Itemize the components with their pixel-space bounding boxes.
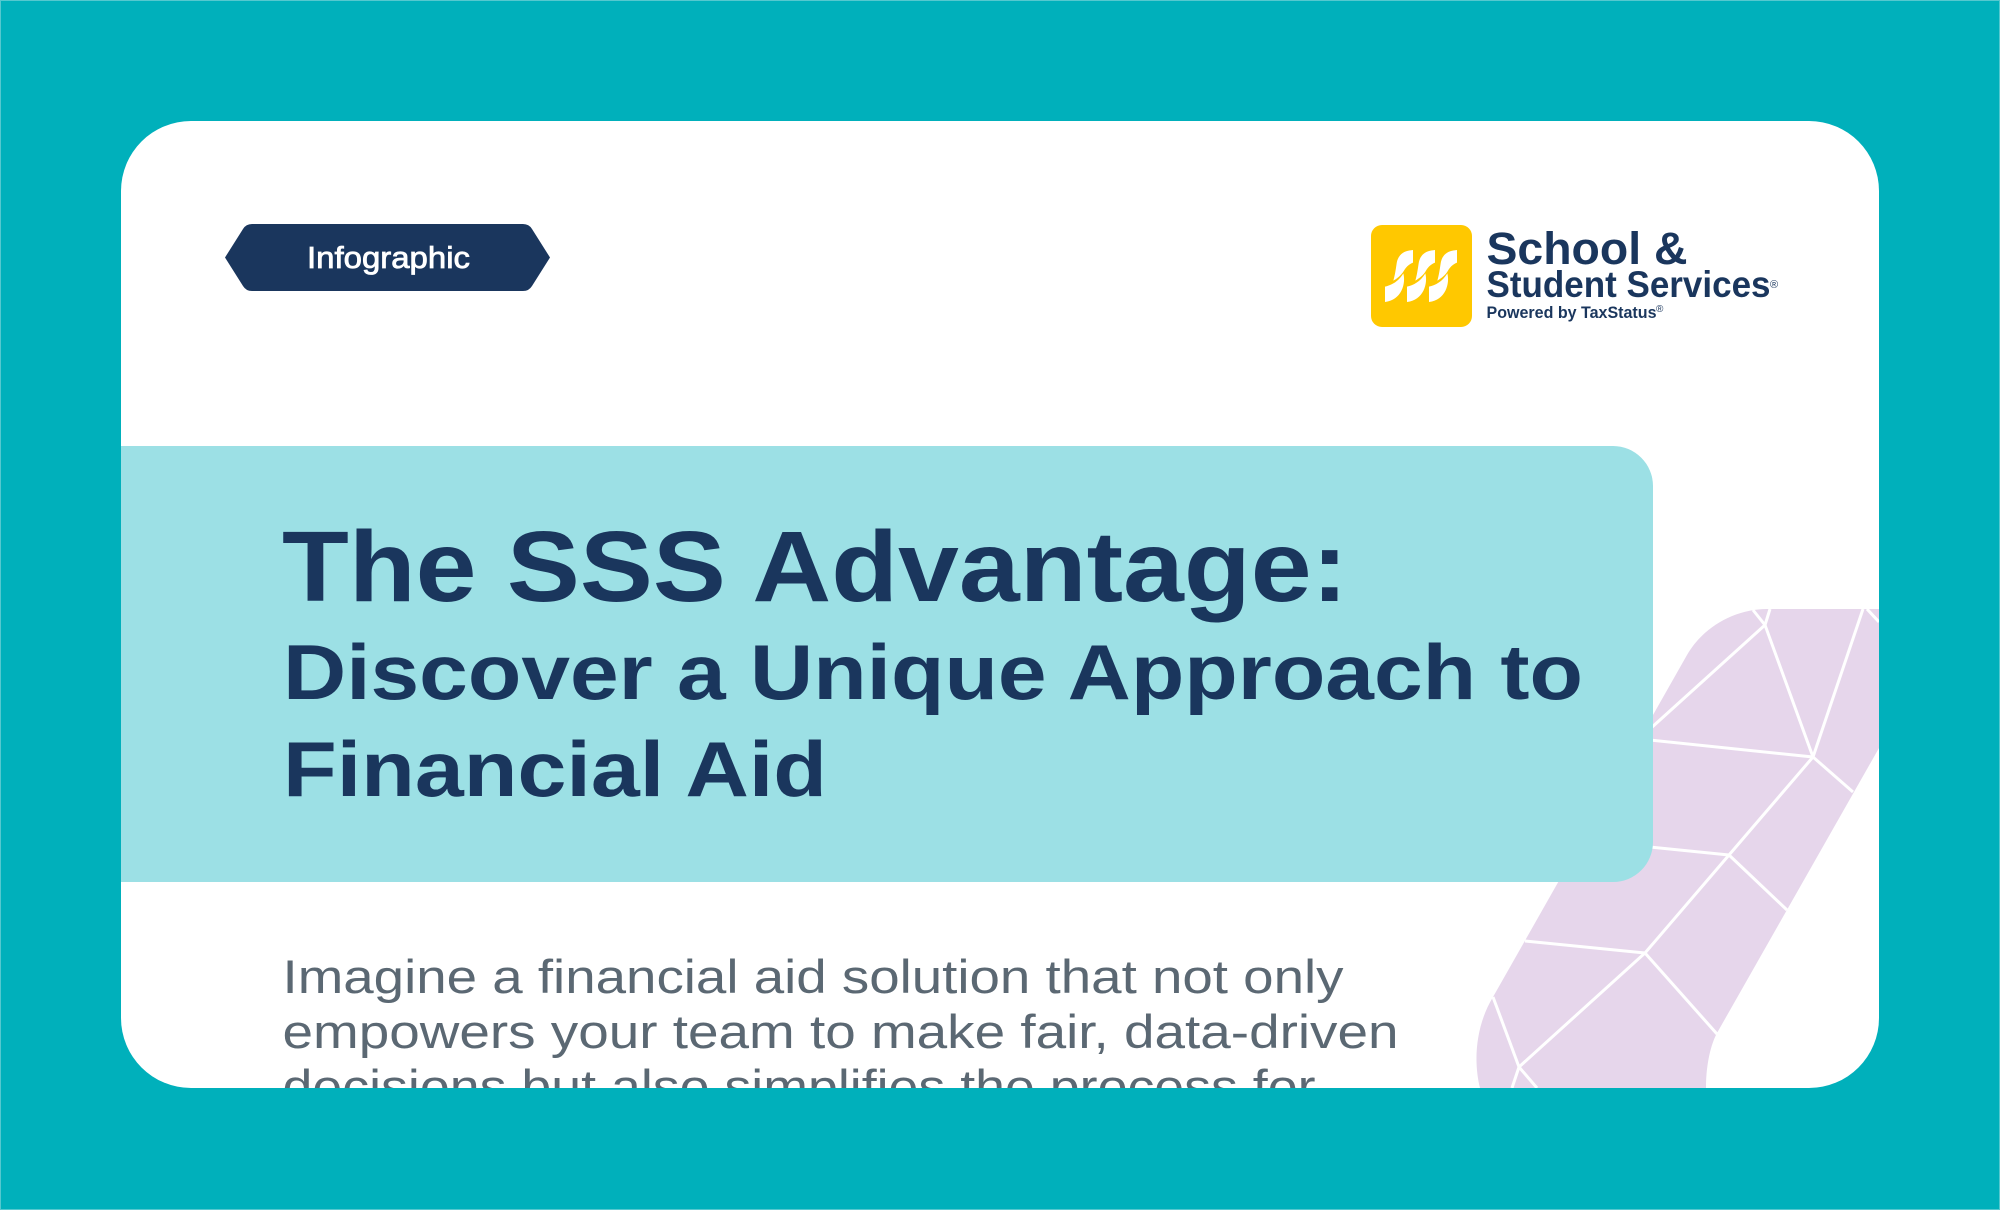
- body text: Imagine a financial aid solution that not only: [282, 950, 1344, 1003]
- panel: title band: [121, 446, 1653, 882]
- title: [282, 511, 1583, 813]
- badge: Infographic: [225, 224, 550, 291]
- title: Financial Aid: [283, 725, 827, 813]
- logo wordmark: School &: [1486, 223, 1688, 274]
- body text: [284, 958, 1395, 1088]
- title: The SSS Advantage:: [282, 511, 1348, 623]
- body text: empowers your team to make fair, data-driven: [282, 1005, 1398, 1058]
- panel: white card: [121, 121, 1879, 1088]
- card contents clipped to the card: [121, 446, 1879, 1113]
- title: Discover a Unique Approach to: [283, 628, 1583, 716]
- logo wordmark: [1486, 223, 1778, 322]
- icon: yellow logo tile: [1371, 225, 1472, 327]
- logo wordmark: Powered by TaxStatus: [1486, 303, 1656, 322]
- badge: Infographic: Infographic: [307, 240, 470, 275]
- logo wordmark: Student Services: [1486, 264, 1770, 305]
- logo: School & Student Services: [1371, 223, 1778, 327]
- body text: decisions but also simplifies the process for: [282, 1060, 1316, 1113]
- logo wordmark: ®: [1656, 304, 1664, 315]
- decorative graphic: lilac faceted stripe: [1476, 609, 1879, 1088]
- logo wordmark: ®: [1770, 279, 1778, 291]
